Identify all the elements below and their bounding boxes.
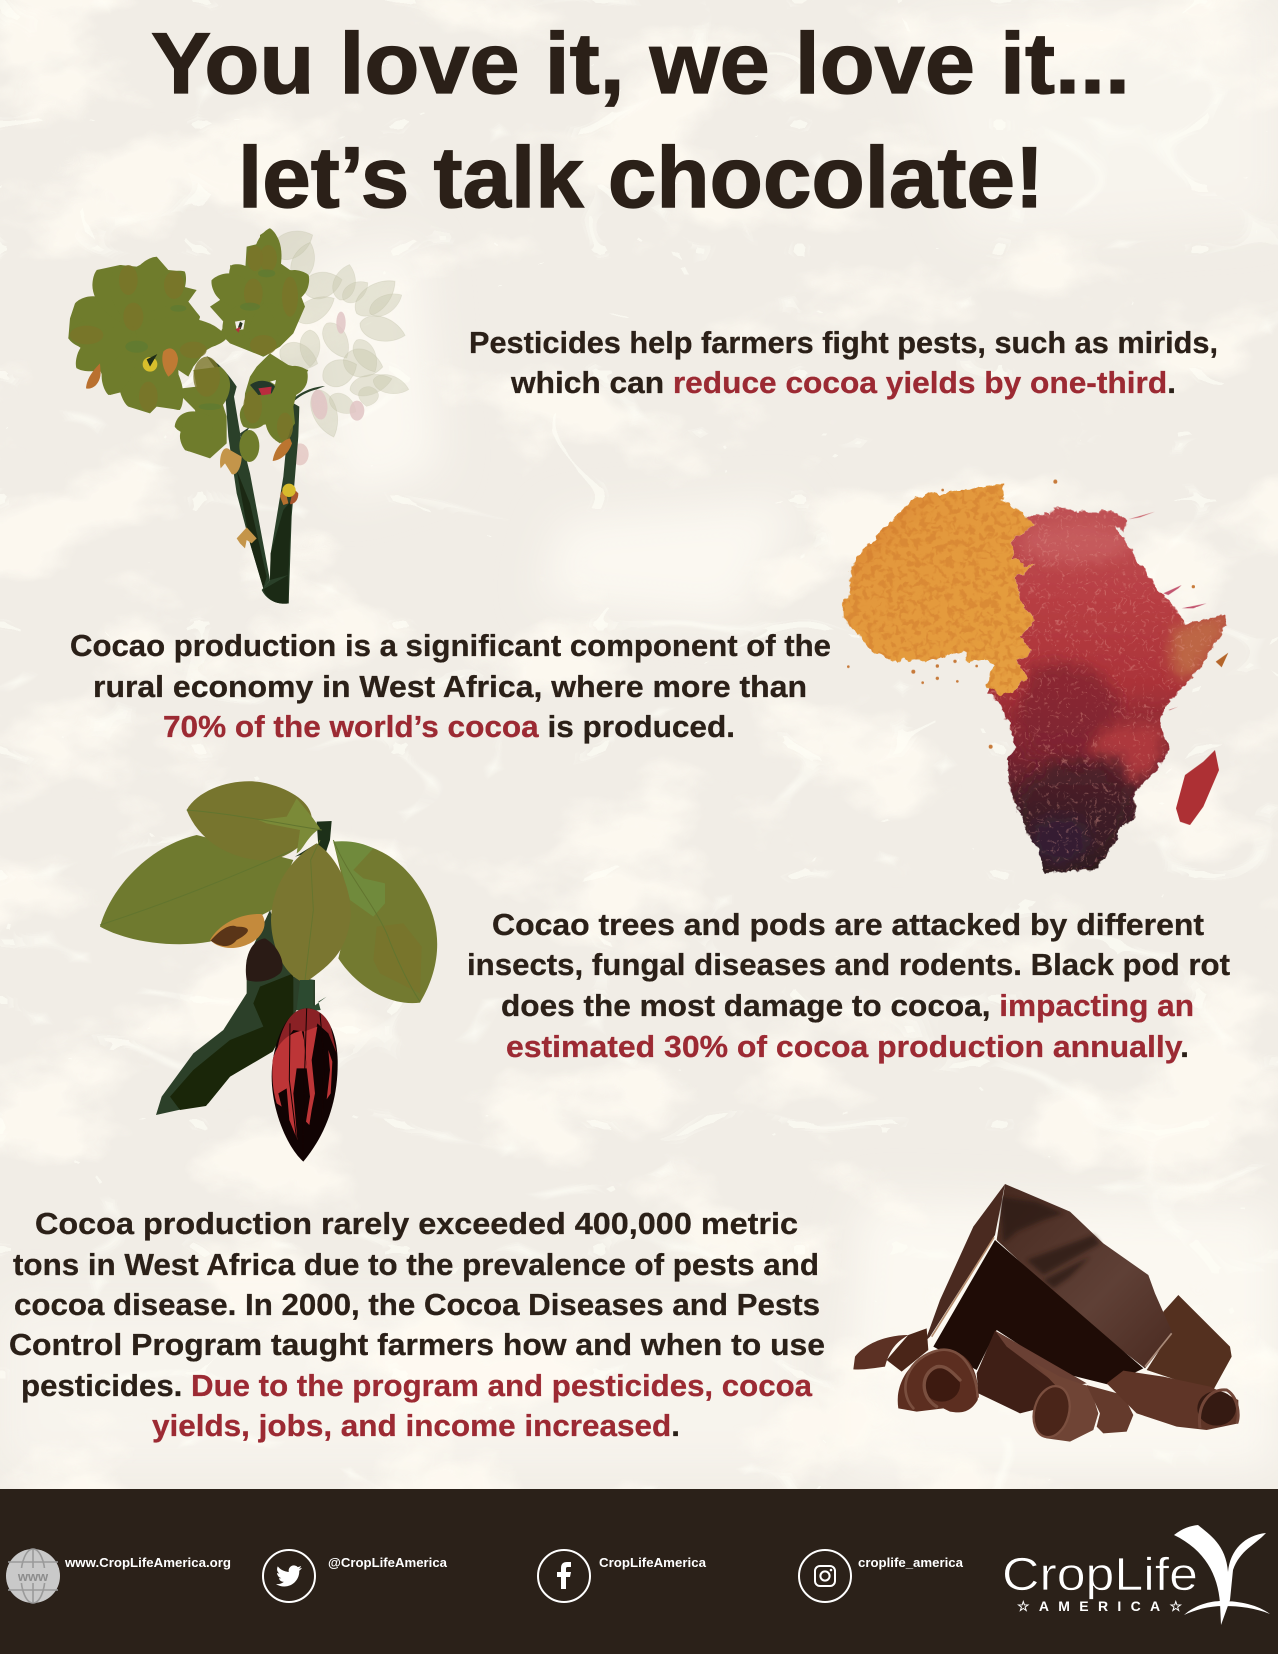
title: let’s talk chocolate! [238,130,1044,226]
icon: instagram [799,1550,851,1602]
title [151,16,1130,226]
footer band [0,1489,1278,1654]
text block: pesticides and mirids: which can reduce cocoa yields by one-third . [510,365,1176,400]
title: You love it, we love it... [151,16,1130,112]
canopy silhouettes [68,228,308,458]
paint splatter [847,480,1207,749]
facebook handle [538,1550,707,1602]
text block: Cocoa Diseases and Pests Control Program: Control Program taught farmers how and when to use [9,1327,825,1362]
west Africa highlight [837,480,1040,700]
icon: seedling [1174,1525,1270,1625]
illustration: chocolate chunks and curls [853,1184,1238,1442]
text block: Cocoa Diseases and Pests Control Program: tons in West Africa due to the prevalence of pests and [13,1247,819,1282]
text block: Cocoa Diseases and Pests Control Program: Cocoa production rarely exceeded 400,000 metric [35,1206,798,1241]
text block: pests and black pod rot: estimated 30% of cocoa production annually . [506,1029,1189,1064]
small gaps and bird [235,320,276,395]
front curl [1028,1363,1098,1442]
twitter handle: @CropLifeAmerica [328,1555,448,1570]
instagram handle: croplife_america [858,1555,964,1570]
red pod [272,980,338,1162]
instagram handle [799,1550,964,1602]
text block: Cocoa Diseases and Pests Control Program: cocoa disease. In 2000, the Cocoa Diseases and Pests [14,1287,820,1322]
trunk [207,356,325,604]
website link with globe icon: www.CropLifeAmerica.org [64,1555,231,1570]
text block: West Africa production [70,628,831,744]
ghost faded leaves [268,223,411,441]
text block: pests and black pod rot: does the most damage to cocoa, impacting an [501,988,1194,1023]
Madagascar [1176,750,1219,825]
text block: pesticides and mirids: Pesticides help farmers fight pests, such as mirids, [469,325,1218,360]
text block: West Africa production: Cocao production is a significant component of the [70,628,831,663]
twitter handle [263,1550,448,1602]
illustration: cacao branch with pod [100,781,437,1162]
main block [925,1184,1173,1385]
middle shard [977,1331,1087,1413]
spiral curl [898,1350,978,1412]
icon: twitter [263,1550,315,1602]
icon: globe: www [17,1569,49,1584]
ripe and dark pods [210,914,283,982]
text block: pests and black pod rot: Cocao trees and pods are attacked by different [492,907,1204,942]
right chunk [1147,1295,1232,1390]
faded pink pods [291,312,364,465]
leaf shading patches [70,245,298,441]
branch [156,821,332,1115]
text block: pesticides and mirids [469,325,1218,400]
illustration: map of Africa [837,480,1230,880]
east and south of Africa [987,503,1230,880]
mainland [837,480,1230,880]
text block: pests and black pod rot [467,907,1230,1064]
website link with globe icon [6,1549,231,1603]
right curls [1087,1371,1238,1433]
text block: Cocoa Diseases and Pests Control Program: yields, jobs, and income increased. [152,1408,680,1443]
illustration: cacao tree [66,223,411,604]
text block: West Africa production: 70% of the world’s cocoa is produced. [163,709,735,744]
CropLife America logo: ☆AMERICA☆ [1017,1598,1182,1614]
leaves [100,781,437,1003]
text block: West Africa production: rural economy in West Africa, where more than [93,669,807,704]
text block: Cocoa Diseases and Pests Control Program [9,1206,825,1443]
facebook handle: CropLifeAmerica [599,1555,707,1570]
text block: Cocoa Diseases and Pests Control Program: pesticides. Due to the program and pesticides, cocoa [21,1368,813,1403]
leaf canopy [66,227,317,462]
left curl [853,1328,928,1372]
pods [86,348,298,548]
CropLife America logo [1002,1525,1270,1625]
icon: facebook [538,1550,590,1602]
icon: globe [6,1549,60,1603]
text block: pests and black pod rot: insects, fungal diseases and rodents. Black pod rot [467,947,1230,982]
CropLife America logo: CropLife [1002,1548,1198,1600]
